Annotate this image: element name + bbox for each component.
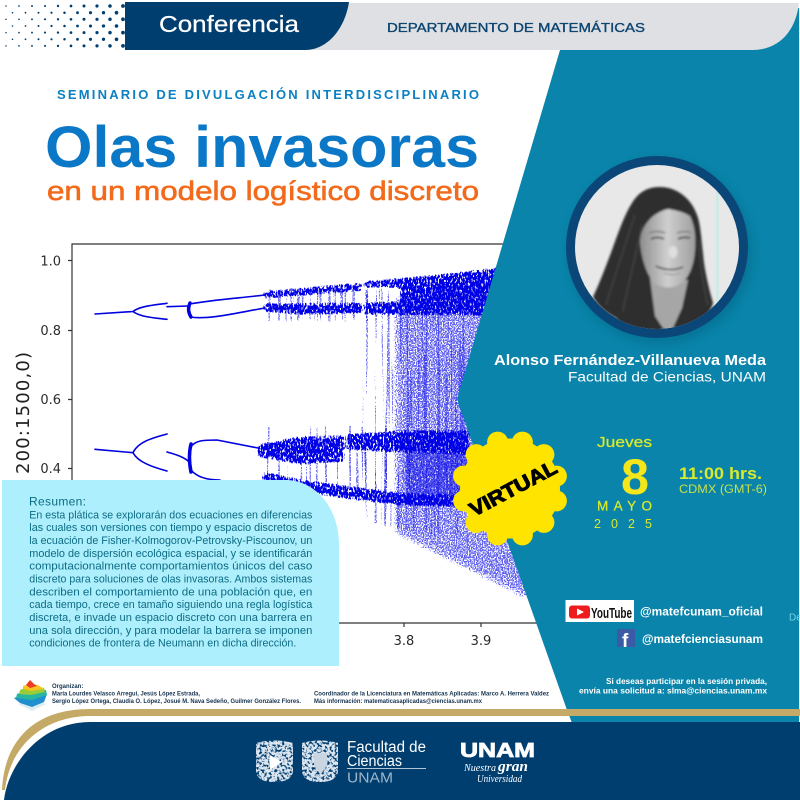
lower chaotic band <box>257 425 470 508</box>
x axis tick labels: 3.8 <box>394 634 414 649</box>
abstract heading: Resumen: <box>29 494 86 508</box>
abstract body: computacionalmente comportamientos únicos del caso <box>29 561 312 573</box>
x axis tick labels: 3.9 <box>471 634 491 649</box>
abstract body: discreta, e invade un espacio discreto con una barrera en <box>29 612 312 624</box>
y axis tick labels <box>40 254 61 477</box>
social: youtube <box>566 600 763 622</box>
logo: UNAM nuestra gran universidad: Universidad <box>477 774 523 785</box>
speaker name: Alonso Fernández-Villanueva Meda <box>494 353 767 369</box>
conferencia banner: Conferencia <box>159 11 299 37</box>
speaker portrait <box>566 156 752 344</box>
y axis tick labels: 0.6 <box>40 393 61 408</box>
abstract body: modelo de dispersión ecológica espacial, y se identificarán <box>29 548 312 560</box>
event time <box>679 465 767 496</box>
title: Olas invasoras <box>45 115 479 180</box>
icon: UNAM crest <box>256 740 293 782</box>
y axis tick labels: 0.4 <box>40 462 61 477</box>
department banner: DEPARTAMENTO DE MATEMÁTICAS <box>387 20 645 35</box>
social: facebook: f <box>622 631 629 652</box>
abstract body <box>29 509 313 650</box>
y axis tick labels: 1.0 <box>40 254 61 270</box>
private session note: Si deseas participar en la sesión privada, <box>606 677 767 686</box>
abstract body: la ecuación de Fisher-Kolmogorov-Petrovsky-Piscounov, un <box>29 535 312 547</box>
diffuse chaotic cloud <box>362 262 560 600</box>
event time: 11:00 hrs. <box>679 465 762 483</box>
icon: organizers logo <box>14 680 47 711</box>
logo: UNAM nuestra gran universidad: gran <box>497 759 528 775</box>
logo: Facultad de Ciencias: Facultad de <box>347 739 426 756</box>
logo: UNAM nuestra gran universidad: Nuestra <box>463 763 496 774</box>
social: youtube: YouTube <box>591 605 632 622</box>
badge: virtual <box>453 432 567 545</box>
x axis tick labels <box>394 634 491 649</box>
y axis label: 200:1500,0) <box>13 352 34 474</box>
icon: Facultad crest <box>302 740 338 782</box>
text: coordinator <box>314 692 549 705</box>
text: organizers: María Lourdes Velasco Arregui, Jesús López Estrada, <box>52 692 200 698</box>
abstract body: describen el comportamiento de una población que, en <box>29 586 312 598</box>
event date: MAYO <box>597 498 652 514</box>
event date <box>594 434 652 531</box>
logo: UNAM nuestra gran universidad: UNAM <box>460 740 535 762</box>
abstract body: En esta plática se explorarán dos ecuaciones en diferencias <box>29 509 313 521</box>
social: facebook: @matefcienciasunam <box>642 634 763 646</box>
private session note <box>579 677 768 696</box>
event date: Jueves <box>597 434 652 451</box>
logo: Facultad de Ciencias: UNAM <box>347 770 393 786</box>
abstract body: cada tiempo, crece en tamaño siguiendo una regla logística <box>29 599 312 611</box>
header bar <box>125 2 799 50</box>
abstract body: condiciones de frontera de Neumann en dicha dirección. <box>29 638 296 650</box>
subtitle: en un modelo logístico discreto <box>47 176 479 206</box>
event time: CDMX (GMT-6) <box>679 484 767 496</box>
periodic branches <box>95 295 265 480</box>
abstract body: una sola dirección, y para modelar la barrera se imponen <box>29 625 312 637</box>
department banner <box>300 3 799 50</box>
abstract body: las cuales son versiones con tiempo y espacio discretos de <box>29 522 312 534</box>
text: organizers: Sergio López Ortega, Claudia O. López, Josué M. Nava Sedeño, Guilmer González Flores. <box>52 699 301 705</box>
abstract body: discreto para soluciones de olas invasoras. Ambos sistemas <box>29 573 313 585</box>
logo: UNAM nuestra gran universidad <box>460 740 535 785</box>
event date: 2025 <box>594 517 652 531</box>
conferencia banner <box>125 2 349 50</box>
text: coordinator: Coordinador de la Licenciatura en Matemáticas Aplicadas: Marco A. Herrera Valdez <box>314 692 549 698</box>
text: organizers <box>52 684 301 705</box>
footer: gold band <box>2 709 800 790</box>
heading: seminar: SEMINARIO DE DIVULGACIÓN INTERDISCIPLINARIO <box>57 87 479 102</box>
badge: virtual: VIRTUAL <box>466 457 561 521</box>
private session note: envía una solicitud a: slma@ciencias.unam.mx <box>579 686 768 696</box>
text: coordinator: Más información: matematicasaplicadas@ciencias.unam.mx <box>314 699 483 705</box>
footer: navy panel <box>4 722 800 800</box>
panel: teal speaker background <box>458 8 799 723</box>
text: organizers: Organizan: <box>52 684 83 690</box>
logo: Facultad de Ciencias: Ciencias <box>347 753 402 770</box>
upper chaotic band <box>263 260 560 322</box>
event date: 8 <box>621 449 649 505</box>
chart axes <box>68 244 545 627</box>
social: facebook <box>617 629 763 652</box>
header graphic: halftone dots <box>6 6 123 48</box>
y axis tick labels: 0.8 <box>40 324 61 339</box>
social: youtube: @matefcunam_oficial <box>640 606 763 618</box>
speaker affiliation: Facultad de Ciencias, UNAM <box>568 370 766 384</box>
line chart: bifurcation diagram <box>13 244 560 649</box>
logo: Facultad de Ciencias <box>347 739 426 786</box>
panel: abstract <box>2 480 339 666</box>
